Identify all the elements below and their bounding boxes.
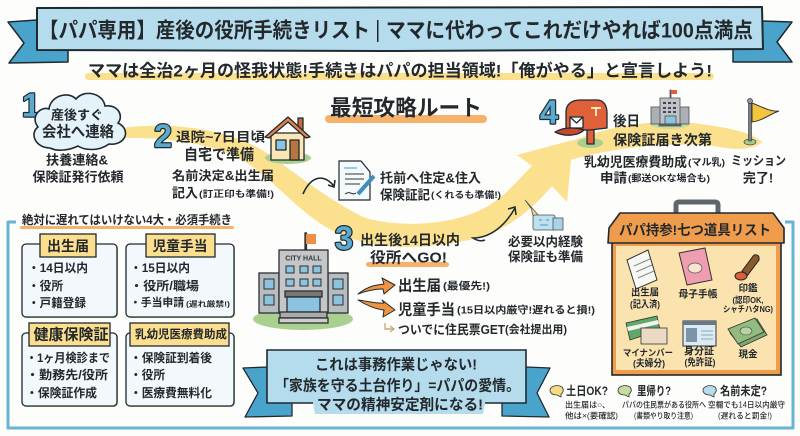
route heading: 最短攻略ルート — [330, 96, 482, 120]
item: my number cards: マイナンバー — [623, 348, 673, 358]
item: maternal handbook — [678, 248, 718, 300]
card: 乳幼児医療費助成: ・医療費無料化 — [130, 385, 212, 400]
card: 乳幼児医療費助成: 乳幼児医療費助成 — [135, 327, 227, 341]
step 4: (郵送OKな場合も) — [628, 172, 710, 184]
note: documents — [508, 234, 583, 264]
FAQ: weekends: 他は×(要確認) — [565, 410, 618, 420]
orange arrows — [358, 278, 395, 317]
step 2: (訂正印も準備!) — [199, 188, 274, 199]
item: birth form: 出生届 — [631, 286, 659, 298]
note: before submission: 保険証記 — [380, 188, 430, 202]
icon: goal flag — [744, 98, 779, 145]
card: 出生届: 出生届 — [47, 238, 89, 254]
FAQ: hometown: (書類やり取り注意) — [634, 410, 693, 420]
note: documents: 必要以内経験 — [508, 234, 583, 249]
card: 児童手当: ・役所/職場 — [130, 278, 199, 293]
icon: city hall: CITY HALL — [285, 256, 322, 262]
step number 3: 3 — [335, 220, 353, 256]
procedures at city hall: ついでに住民票GET — [398, 322, 505, 337]
step 3: 出生後14日以内 — [360, 232, 460, 248]
icon: small city hall — [650, 90, 690, 129]
icon: document and pen — [339, 161, 374, 200]
card: 健康保険証: ・保険証作成 — [26, 385, 97, 400]
yellow route road — [122, 122, 762, 247]
bottom message ribbon — [243, 350, 550, 417]
item: my number cards: (夫婦分) — [633, 358, 665, 370]
card: 健康保険証: ・1ヶ月検診まで — [26, 350, 110, 365]
bottom message ribbon: これは事務作業じゃない! — [315, 356, 477, 374]
step 4: 後日 — [613, 113, 640, 129]
subtitle with highlight: ママは全治2ヶ月の怪我状態!手続きはパパの担当領域!「俺がやる」と宣言しよう! — [88, 60, 712, 80]
title text: 【パパ専用】産後の役所手続きリスト — [39, 20, 370, 42]
toolbox handle — [676, 202, 718, 214]
card: 乳幼児医療費助成: ・役所 — [130, 368, 165, 382]
icon: house — [265, 117, 311, 164]
FAQ: name undecided: 名前未定? — [720, 383, 767, 398]
card: 児童手当: 児童手当 — [152, 238, 208, 254]
item: seal stamp: (認印OK, — [732, 295, 764, 305]
FAQ: hometown: パパの住民票がある役所へ — [622, 400, 706, 410]
step 4: 申請 — [600, 170, 627, 186]
procedures at city hall: 出生届 — [398, 278, 441, 294]
section heading: four procedures: 絶対に遅れてはいけない4大・必須手続き — [22, 212, 232, 227]
procedures at city hall: (会社提出用) — [505, 322, 567, 336]
item: birth form: (記入済) — [630, 298, 660, 310]
card: 出生届: ・戸籍登録 — [28, 295, 86, 310]
item: ID card: (免許証) — [684, 356, 716, 368]
step 2 — [154, 118, 274, 200]
card: 児童手当 — [126, 234, 235, 318]
item: birth form — [627, 250, 660, 310]
mission complete text — [731, 154, 786, 186]
note: before submission: 托前へ住定&住入 — [380, 170, 481, 186]
bottom message ribbon: ママの精神安定剤になる! — [317, 396, 483, 414]
card: 乳幼児医療費助成 — [126, 323, 235, 407]
note: before submission — [380, 170, 501, 202]
card: 児童手当: (遅れ厳禁!) — [186, 298, 231, 308]
step 4: (マル乳) — [688, 156, 725, 168]
step number 2: 2 — [154, 118, 172, 154]
outer frame — [8, 222, 793, 428]
step number 1: 1 — [22, 86, 40, 124]
curved arrow to documents note — [473, 207, 516, 241]
card: 出生届 — [22, 234, 118, 318]
FAQ: name undecided — [703, 383, 785, 420]
FAQ: weekends — [550, 383, 618, 420]
FAQ: name undecided: (遅れると罰金!) — [718, 410, 772, 420]
card: 乳幼児医療費助成: ・保険証到着後 — [130, 350, 212, 365]
title ribbon — [8, 7, 792, 63]
item: maternal handbook: 母子手帳 — [678, 288, 718, 300]
step 1: 保険証発行依頼 — [32, 170, 124, 184]
FAQ: weekends: 土日OK? — [566, 383, 608, 398]
step 1: 扶養連絡& — [46, 152, 108, 168]
item: seal stamp — [723, 255, 773, 314]
cloud — [34, 93, 126, 150]
card: 健康保険証: ・勤務先/役所 — [26, 367, 108, 382]
step 1 — [22, 86, 126, 184]
FAQ: hometown: 里帰り? — [637, 384, 671, 398]
procedures at city hall: (最優先!) — [443, 280, 490, 292]
icon: city hall — [253, 233, 353, 330]
step 1: 会社へ連絡 — [42, 122, 114, 140]
step 2: 名前決定&出生届 — [172, 168, 274, 183]
FAQ: hometown — [618, 384, 706, 420]
procedures at city hall — [385, 278, 595, 337]
step number 4: 4 — [540, 94, 559, 130]
mission complete text: 完了! — [743, 170, 773, 186]
procedures at city hall: (15日以内厳守!遅れると損!) — [457, 304, 595, 316]
step 2: 記入 — [172, 186, 198, 200]
bottom message ribbon: 「家族を守る土台作り」=パパの愛情。 — [275, 376, 520, 394]
note: before submission: (くれるも準備!) — [431, 189, 501, 200]
title text — [39, 20, 753, 42]
icon: paper party — [525, 200, 563, 230]
item: ID card — [683, 321, 716, 368]
card: 健康保険証: 健康保険証 — [34, 326, 108, 344]
step 2: 自宅で準備 — [184, 146, 254, 164]
step 4: 保険証届き次第 — [613, 132, 712, 148]
curved arrow to document — [303, 178, 335, 194]
mission complete text: ミッション — [731, 154, 786, 168]
step 4 — [540, 94, 725, 186]
FAQ: weekends: 出生届は○、 — [565, 400, 610, 410]
item: seal stamp: 印鑑 — [738, 282, 758, 294]
icon: mailbox — [555, 100, 607, 148]
item: cash — [728, 318, 767, 360]
title text: ママに代わってこれだけやれば100点満点 — [386, 20, 753, 42]
step 3: 役所へGO! — [370, 248, 447, 266]
item: cash: 現金 — [738, 348, 758, 360]
card: 出生届: ・役所 — [28, 279, 63, 293]
item: seal stamp: シャチハタNG) — [723, 304, 773, 314]
card: 児童手当: ・手当申請 — [130, 295, 184, 309]
procedures at city hall: 児童手当 — [398, 300, 455, 318]
toolbox — [608, 202, 784, 375]
FAQ: name undecided: 空欄でも14日以内厳守 — [708, 400, 785, 410]
step 4: 乳幼児医療費助成 — [584, 154, 687, 170]
item: ID card: 身分証 — [684, 344, 714, 358]
note: documents: 保険証も準備 — [508, 249, 583, 264]
step 2: 退院~7日目頃 — [176, 130, 265, 144]
item: my number cards — [623, 316, 673, 370]
step 3 — [335, 220, 460, 267]
step 1: 産後すぐ — [51, 108, 103, 122]
card: 出生届: ・14日以内 — [28, 260, 88, 275]
card: 児童手当: ・15日以内 — [130, 260, 190, 275]
toolbox title: パパ持参!七つ道具リスト — [619, 222, 771, 238]
card: 健康保険証 — [22, 323, 118, 407]
